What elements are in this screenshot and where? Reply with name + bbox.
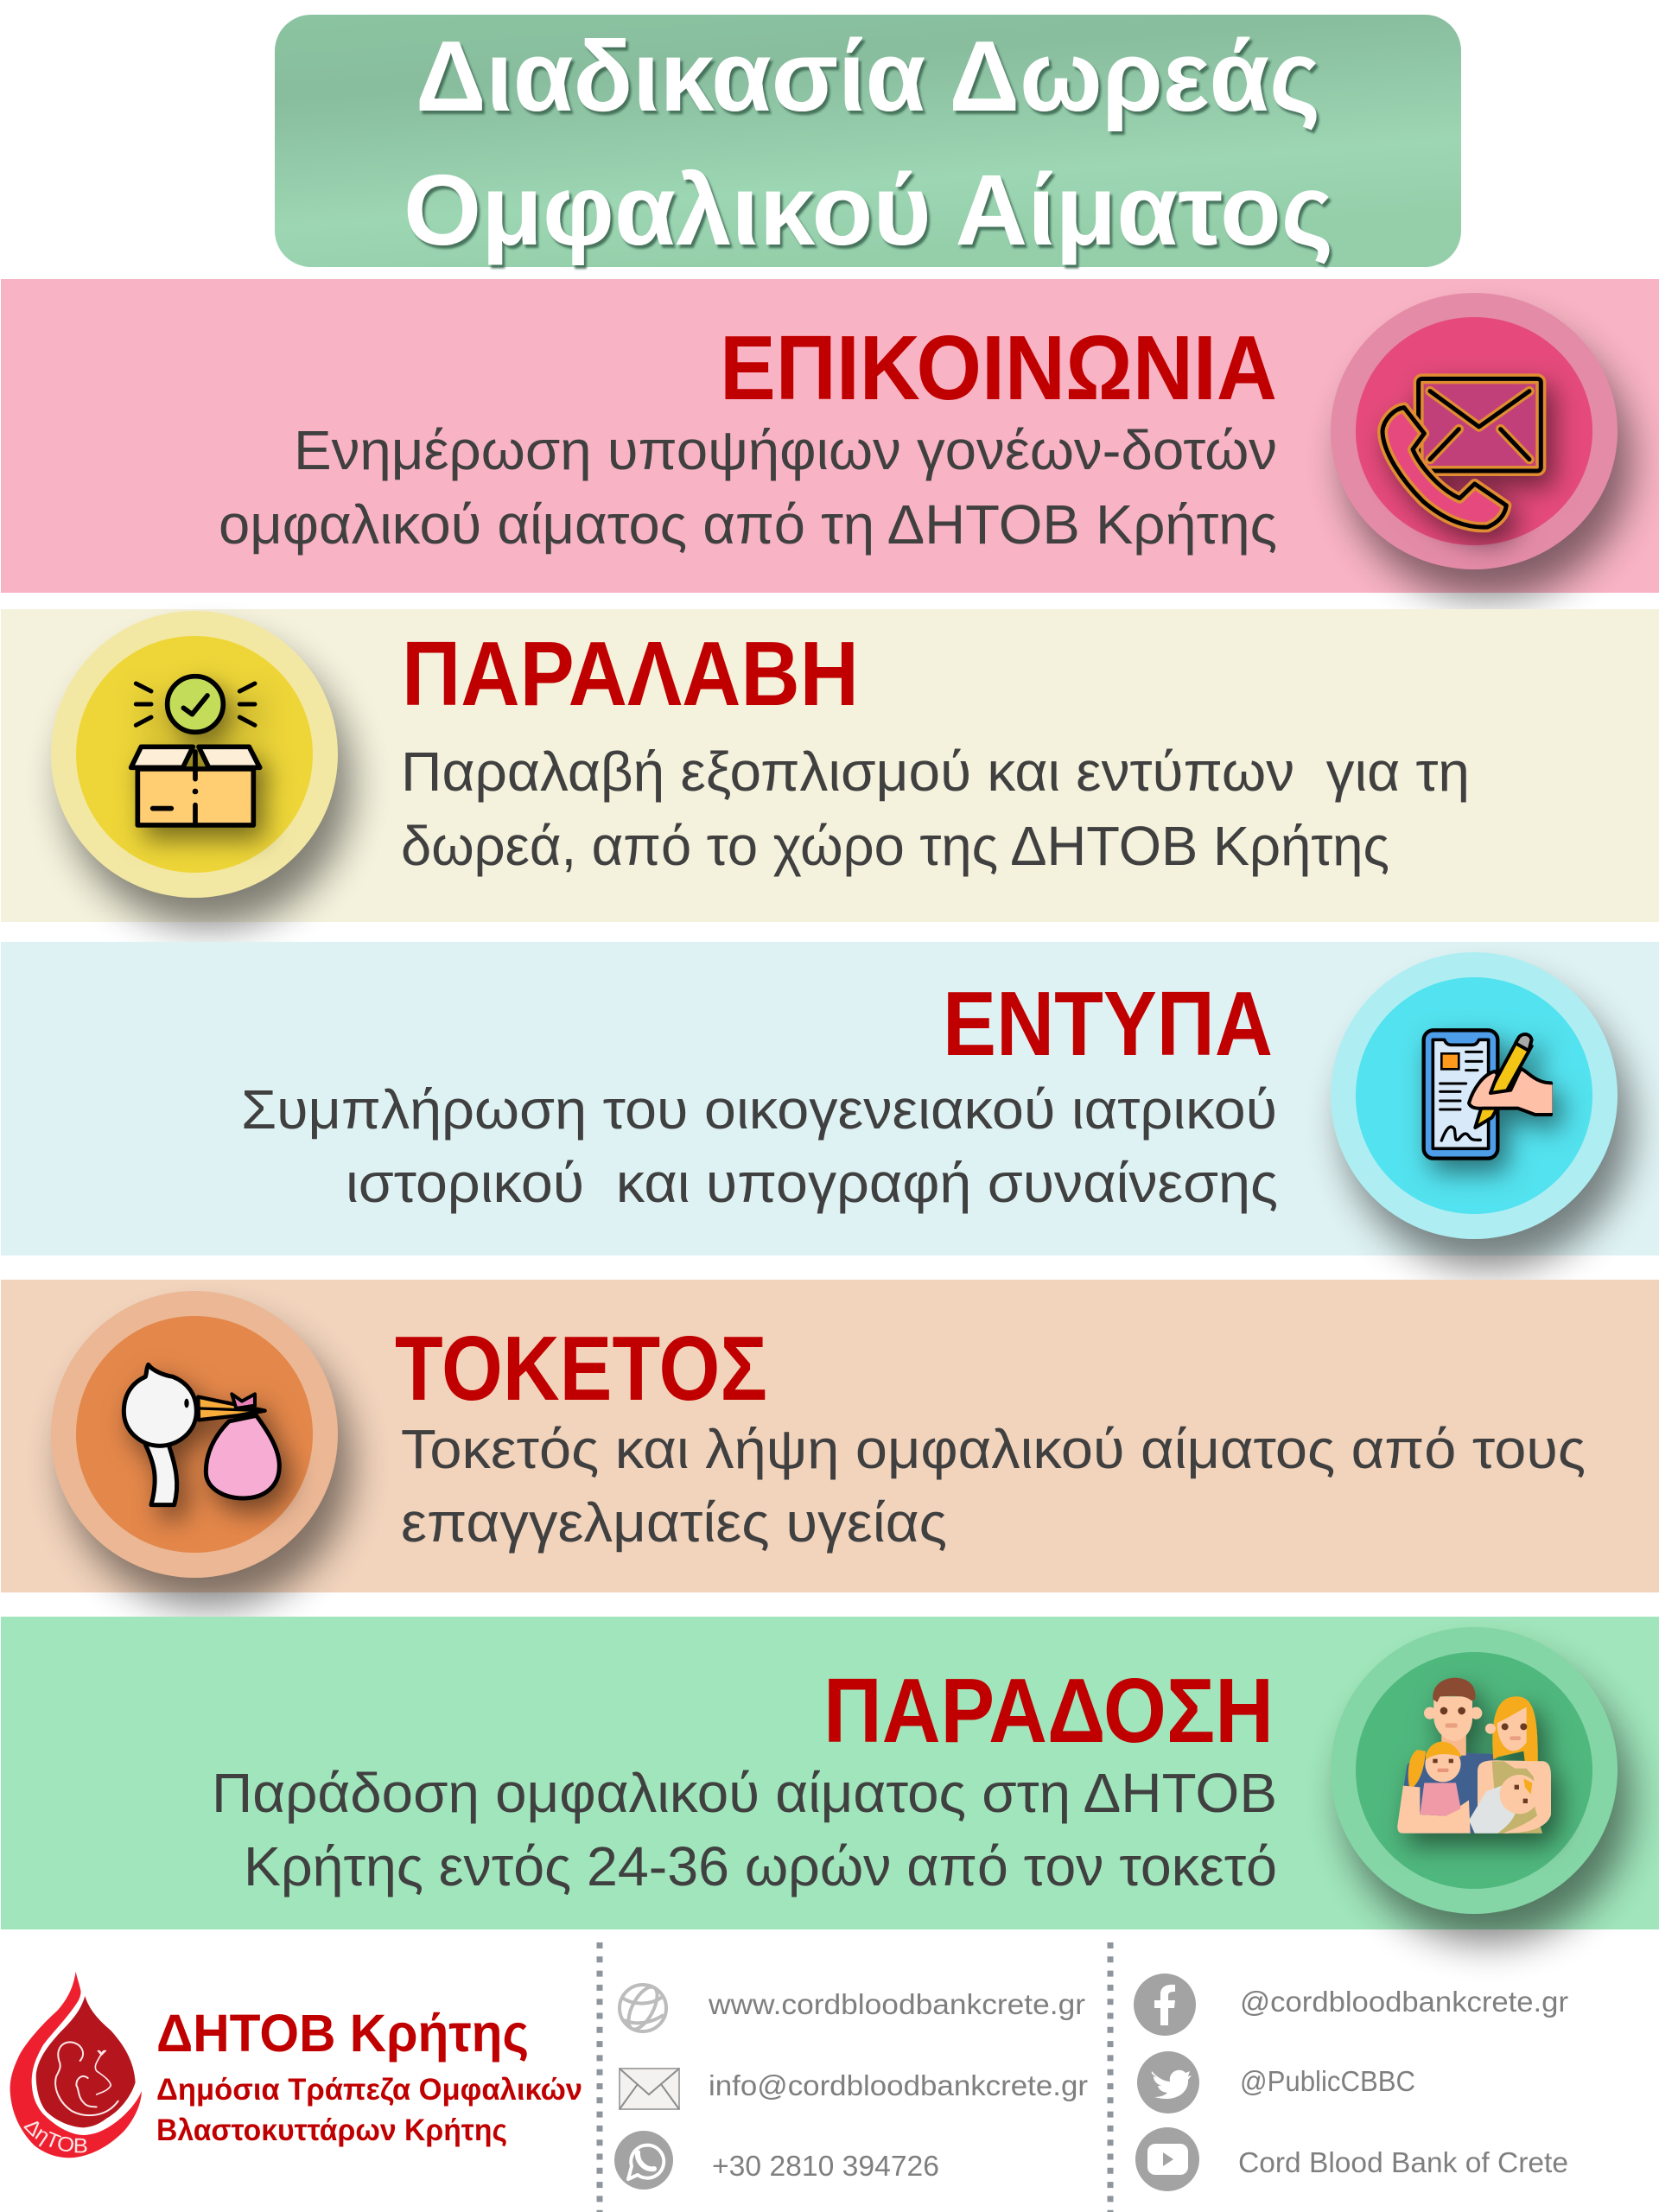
panel: step 2 pickup <box>1 609 1659 927</box>
icon: parcel box badge <box>51 611 352 927</box>
title text <box>404 20 1333 266</box>
heading: handover: ΠΑΡΑΔΟΣΗ <box>823 1660 1274 1762</box>
description: pickup: δωρεά, από το χώρο της ΔΗΤΟΒ Κρήτης <box>401 815 1389 877</box>
heading: contact: ΕΠΙΚΟΙΝΩΝΙΑ <box>720 317 1277 419</box>
twitter handle: @PublicCBBC <box>1240 2065 1415 2097</box>
description: handover: Παράδοση ομφαλικού αίματος στη ΔΗΤΟΒ <box>212 1762 1277 1824</box>
description: handover: Κρήτης εντός 24-36 ωρών από τον τοκετό <box>244 1835 1277 1897</box>
panel: step 1 contact <box>1 279 1659 599</box>
youtube channel: Cord Blood Bank of Crete <box>1238 2146 1568 2178</box>
title text: Ομφαλικού Αίματος <box>404 154 1333 266</box>
footer: blood bank logo and name <box>10 1972 582 2158</box>
logo: blood drop: ΔηΤΟΒ <box>23 2121 86 2153</box>
description: contact: Ενημέρωση υποψήφιων γονέων-δοτών <box>294 419 1277 481</box>
description: birth <box>401 1418 1586 1554</box>
description: forms: Συμπλήρωση του οικογενειακού ιατρικού <box>241 1078 1277 1141</box>
panel: step 5 handover <box>1 1617 1659 1943</box>
description: handover <box>212 1762 1277 1897</box>
description: forms: ιστορικού και υπογραφή συναίνεσης <box>346 1152 1278 1214</box>
icon: facebook <box>1134 1974 1196 2036</box>
title text: Διαδικασία Δωρεάς <box>416 20 1320 132</box>
icon: stork with bundle badge <box>51 1291 352 1607</box>
title banner <box>275 15 1461 267</box>
email: info@cordbloodbankcrete.gr <box>709 2069 1088 2101</box>
facebook handle: @cordbloodbankcrete.gr <box>1240 1986 1568 2018</box>
panel: step 4 delivery birth <box>1 1280 1659 1607</box>
heading: pickup: ΠΑΡΑΛΑΒΗ <box>402 623 859 725</box>
panel: step 3 forms <box>1 942 1659 1268</box>
organization name: Δημόσια Τράπεζα Ομφαλικών <box>156 2073 582 2107</box>
icon: phone and envelope badge <box>1331 293 1631 599</box>
icon: twitter <box>1137 2051 1199 2113</box>
icon: globe <box>620 1983 666 2033</box>
description: birth: επαγγελματίες υγείας <box>401 1491 947 1554</box>
heading: forms: ΕΝΤΥΠΑ <box>943 973 1273 1075</box>
organization name: ΔΗΤΟΒ Κρήτης <box>156 2004 529 2063</box>
icon: family badge <box>1331 1627 1631 1943</box>
description: pickup <box>401 741 1470 877</box>
description: contact <box>219 419 1277 556</box>
icon: whatsapp <box>614 2131 673 2190</box>
description: pickup: Παραλαβή εξοπλισμού και εντύπων για τη <box>401 741 1470 803</box>
organization name: Βλαστοκυττάρων Κρήτης <box>156 2113 507 2147</box>
footer: contact details <box>614 1974 1568 2191</box>
logo: blood drop <box>10 1972 142 2158</box>
organization name <box>156 2004 582 2147</box>
icon: envelope <box>620 2069 679 2109</box>
description: forms <box>241 1078 1278 1214</box>
icon: signing on phone badge <box>1331 952 1631 1268</box>
description: contact: ομφαλικού αίματος από τη ΔΗΤΟΒ Κρήτης <box>219 493 1277 556</box>
phone number: +30 2810 394726 <box>712 2150 939 2182</box>
website: www.cordbloodbankcrete.gr <box>708 1988 1085 2020</box>
description: birth: Τοκετός και λήψη ομφαλικού αίματος από τους <box>401 1418 1586 1480</box>
heading: birth: ΤΟΚΕΤΟΣ <box>395 1318 767 1420</box>
icon: youtube <box>1135 2127 1199 2191</box>
